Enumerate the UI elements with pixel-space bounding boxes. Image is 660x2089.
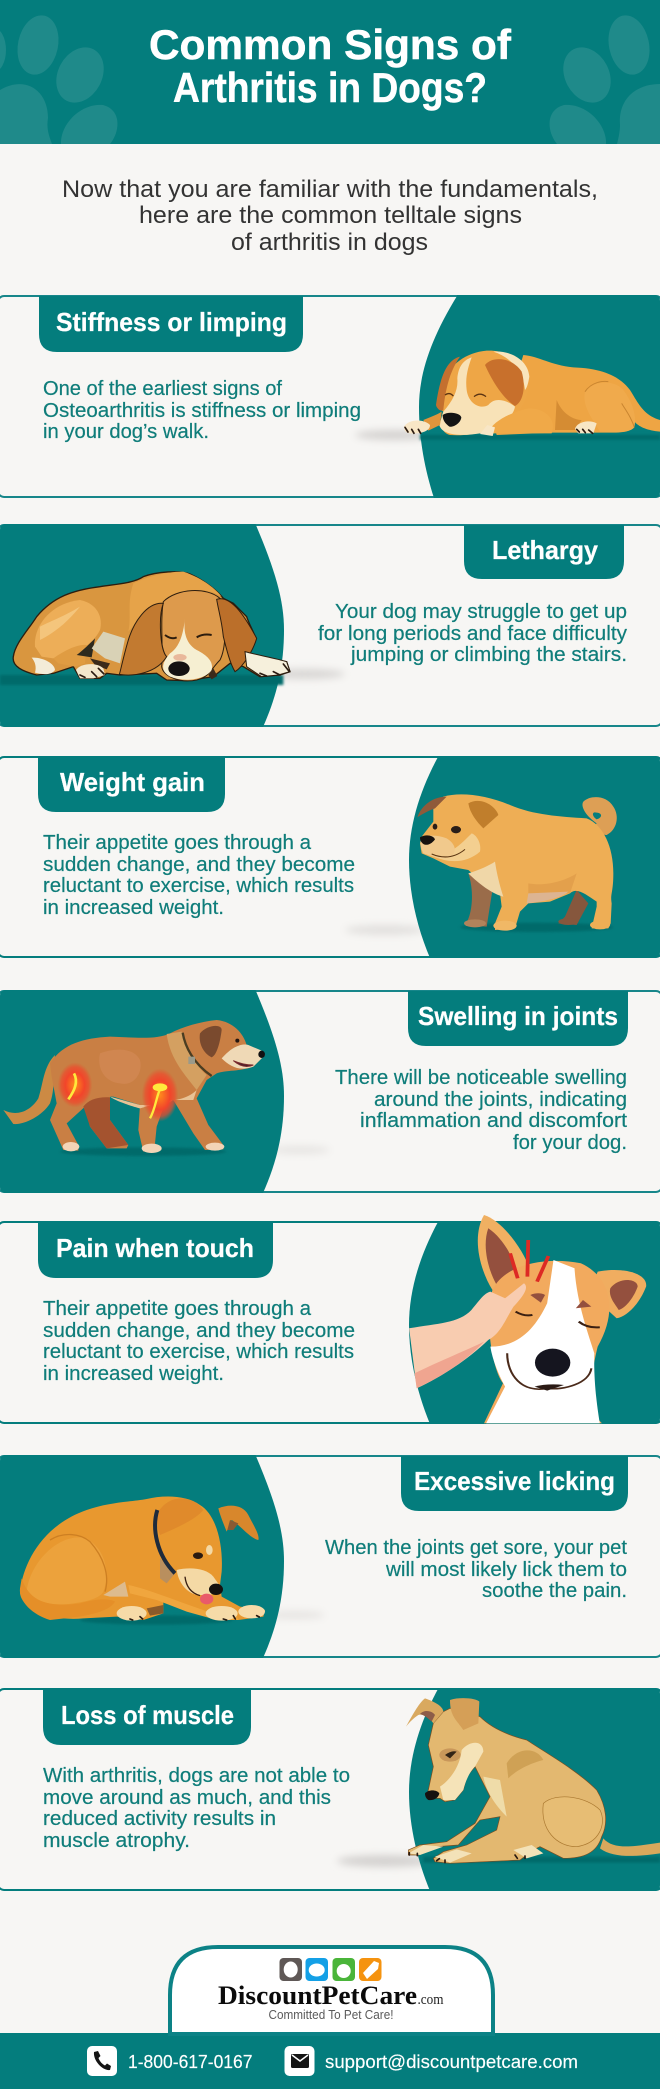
body text: around the joints, indicating — [374, 1089, 627, 1111]
paw print decoration — [0, 11, 660, 144]
body text — [325, 1537, 627, 1602]
body text: jumping or climbing the stairs. — [350, 644, 627, 666]
icon: bird logo tile — [332, 1958, 355, 1981]
body text: Their appetite goes through a — [43, 832, 312, 854]
panel: weight gain — [0, 756, 660, 958]
contact: email — [284, 2046, 578, 2076]
icon: dog licking paw — [20, 1497, 265, 1625]
body text: sudden change, and they become — [43, 1320, 355, 1342]
panel: lethargy — [0, 524, 660, 727]
contact: phone — [87, 2046, 252, 2076]
body text: in increased weight. — [43, 1363, 224, 1385]
body text: in increased weight. — [43, 897, 224, 919]
logo tagline: Committed To Pet Care! — [268, 2008, 394, 2022]
body text: One of the earliest signs of — [43, 378, 282, 400]
icon: thin sitting dog — [406, 1698, 660, 1863]
body text: inflammation and discomfort — [360, 1110, 627, 1132]
intro text: of arthritis in dogs — [231, 229, 428, 256]
body text: reduced activity results in — [43, 1808, 276, 1830]
body text: for long periods and face difficulty — [318, 623, 627, 645]
body text — [43, 1298, 355, 1385]
icon: droopy lying dog — [0, 572, 290, 685]
heading badge: Swelling in joints — [418, 1001, 618, 1031]
heading badge — [43, 1689, 251, 1745]
footer bar — [0, 2033, 660, 2089]
heading badge: Excessive licking — [414, 1466, 615, 1496]
body text: Osteoarthritis is stiffness or limping — [43, 400, 361, 422]
icon: dog with inflamed joints — [3, 1020, 265, 1156]
body text: sudden change, and they become — [43, 854, 355, 876]
intro text: here are the common telltale signs — [139, 202, 522, 229]
body text: soothe the pain. — [482, 1580, 627, 1602]
heading badge — [464, 525, 624, 579]
heading badge: Lethargy — [492, 535, 599, 565]
body text — [335, 1067, 627, 1154]
icon: cat logo tile — [306, 1958, 328, 1981]
body text: reluctant to exercise, which results — [43, 875, 354, 897]
panel: swelling in joints — [0, 990, 660, 1193]
body text: reluctant to exercise, which results — [43, 1341, 354, 1363]
logo panel — [170, 1947, 493, 2034]
body text: muscle atrophy. — [43, 1830, 190, 1852]
title: Arthritis in Dogs? — [173, 64, 487, 111]
heading badge — [38, 757, 225, 812]
body text: in your dog’s walk. — [43, 421, 209, 443]
body text: for your dog. — [513, 1132, 627, 1154]
heading badge: Weight gain — [60, 767, 205, 797]
heading badge — [408, 991, 628, 1046]
panel: excessive licking — [0, 1455, 660, 1658]
body text — [43, 1765, 350, 1852]
icon: price tag logo tile — [359, 1958, 382, 1981]
body text: Their appetite goes through a — [43, 1298, 312, 1320]
contact: email: support@discountpetcare.com — [325, 2051, 578, 2072]
intro text — [62, 176, 598, 256]
header banner — [0, 0, 660, 144]
heading badge: Pain when touch — [56, 1233, 254, 1263]
body text: move around as much, and this — [43, 1787, 331, 1809]
panel: loss of muscle — [0, 1688, 660, 1891]
body text — [43, 832, 355, 919]
heading badge: Stiffness or limping — [56, 307, 287, 337]
body text — [318, 601, 627, 666]
body text: With arthritis, dogs are not able to — [43, 1765, 350, 1787]
icon: dog logo tile — [280, 1958, 302, 1981]
heading badge — [401, 1456, 628, 1511]
logo wordmark: DiscountPetCare — [218, 1981, 417, 2010]
heading badge — [39, 296, 303, 352]
body text: There will be noticeable swelling — [335, 1067, 627, 1089]
body text: When the joints get sore, your pet — [325, 1537, 627, 1559]
body text — [43, 378, 361, 443]
intro text: Now that you are familiar with the fundamentals, — [62, 176, 598, 203]
contact: phone: 1-800-617-0167 — [128, 2051, 252, 2072]
icon: dog being touched on the head — [409, 1215, 646, 1423]
panel: pain when touch — [0, 1215, 660, 1424]
icon: lying sleepy dog — [404, 351, 660, 440]
heading badge — [38, 1222, 273, 1278]
icon: overweight dog — [417, 794, 617, 932]
body text: will most likely lick them to — [385, 1559, 627, 1581]
logo domain suffix: .com — [418, 1992, 444, 2008]
title: Common Signs of — [149, 21, 512, 68]
body text: Your dog may struggle to get up — [335, 601, 627, 623]
panel: stiffness or limping — [0, 295, 660, 498]
heading badge: Loss of muscle — [61, 1700, 234, 1730]
title — [149, 21, 512, 111]
